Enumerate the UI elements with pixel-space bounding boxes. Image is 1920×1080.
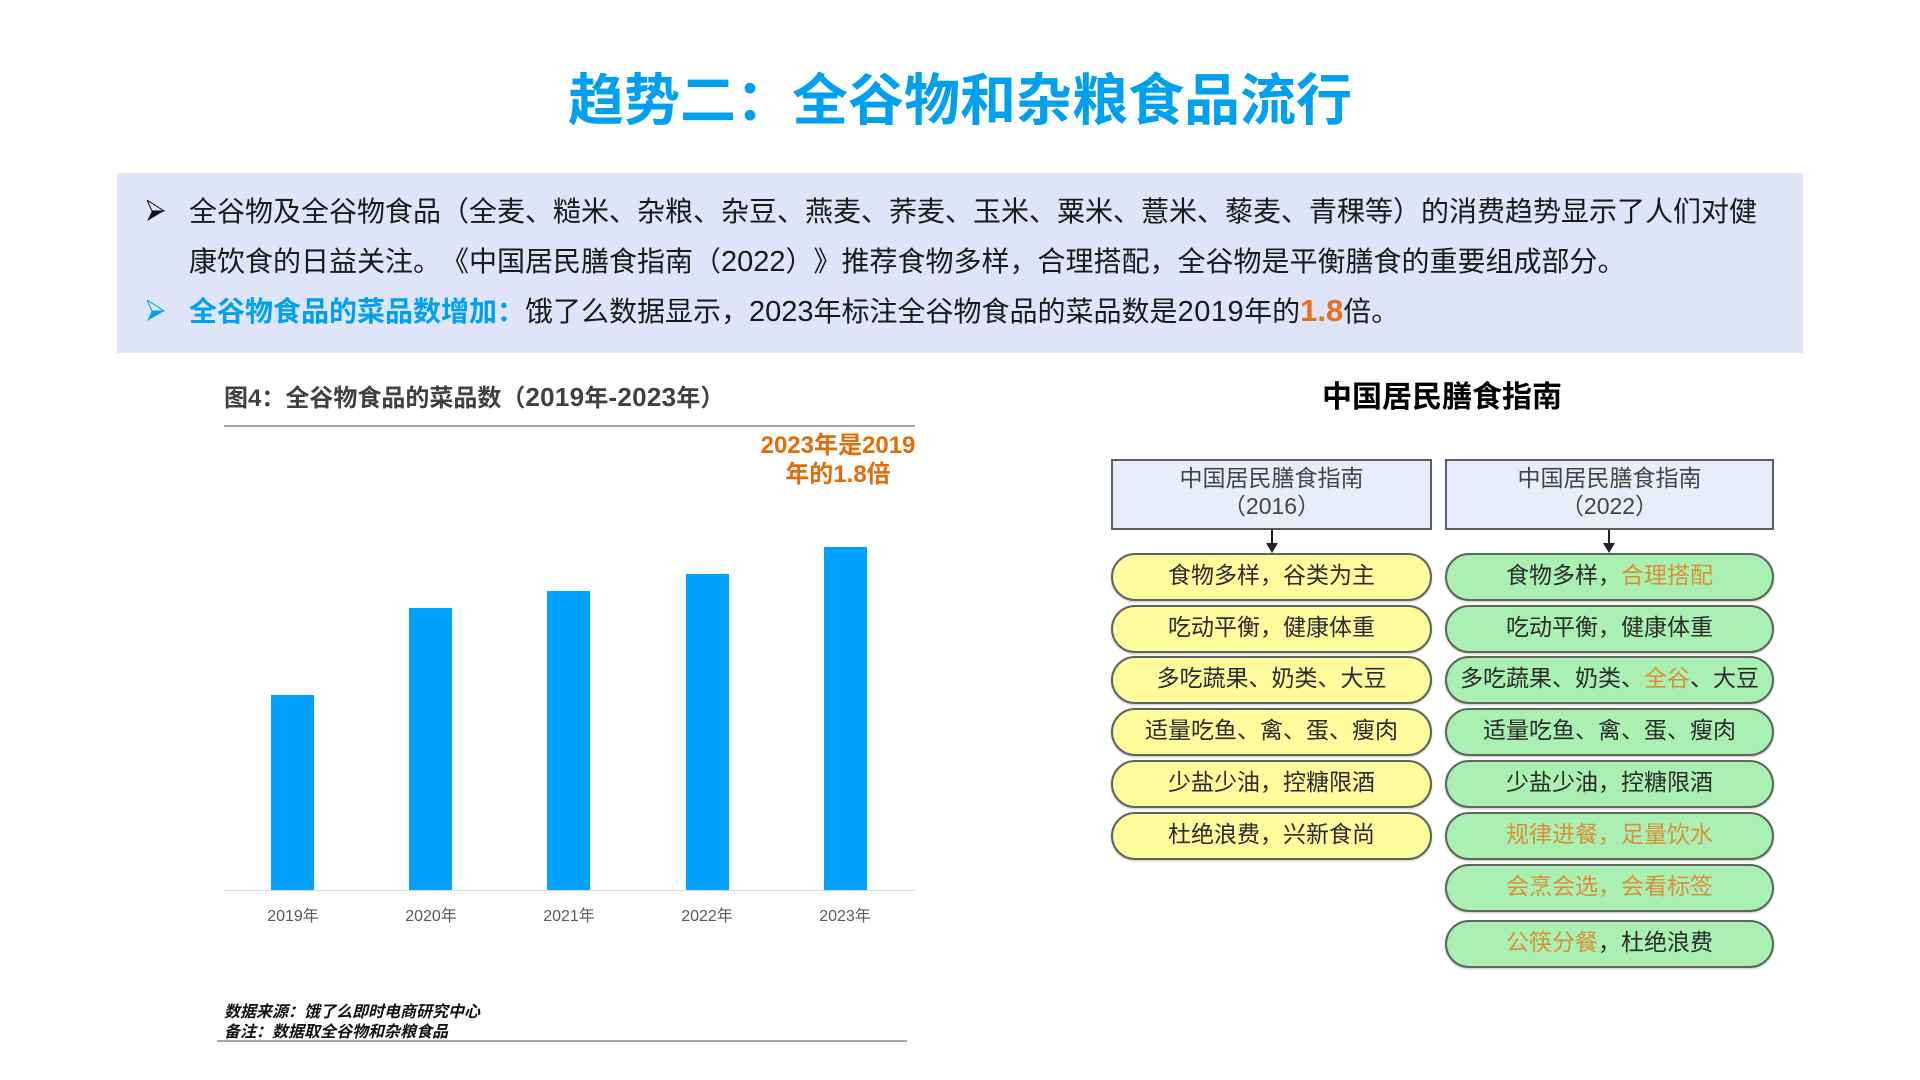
chart: bar chart of whole grain dishes	[224, 425, 915, 891]
header box 2016: 中国居民膳食指南	[1180, 465, 1364, 491]
pill 2022 row 2	[1445, 605, 1774, 653]
bar: 2023	[824, 547, 867, 890]
pill 2022 row 5: 少盐少油，控糖限酒	[1506, 769, 1713, 795]
pill 2022 row 6: 规律进餐，足量饮水	[1506, 821, 1713, 847]
icon: bullet arrow blue 2	[147, 300, 165, 321]
pill 2022 row 7	[1445, 864, 1774, 912]
pill 2016 row 4	[1111, 708, 1432, 756]
pill 2022 row 8	[1445, 920, 1774, 968]
pill 2016 row 2	[1111, 605, 1432, 653]
pill 2016 row 2: 吃动平衡，健康体重	[1168, 614, 1375, 640]
axis label: 2020: 2020年	[405, 908, 457, 925]
bar: 2022	[686, 574, 729, 890]
pill 2022 row 8: 公筷分餐，杜绝浪费	[1506, 929, 1713, 955]
pill 2016 row 5: 少盐少油，控糖限酒	[1168, 769, 1375, 795]
header box 2022: （2022）	[1561, 493, 1658, 519]
pill 2022 row 6	[1445, 812, 1774, 860]
pill 2022 row 2: 吃动平衡，健康体重	[1506, 614, 1713, 640]
axis label: 2019: 2019年	[267, 908, 319, 925]
bar: 2019	[271, 695, 314, 890]
pill 2022 row 1	[1445, 553, 1774, 601]
title: 趋势二：全谷物和杂粮食品流行	[568, 69, 1352, 132]
axis label: 2022: 2022年	[681, 908, 733, 925]
heading: dietary guidelines: 中国居民膳食指南	[1322, 381, 1562, 414]
pill 2016 row 3: 多吃蔬果、奶类、大豆	[1156, 665, 1386, 691]
pill 2016 row 6	[1111, 812, 1432, 860]
pill 2022 row 7: 会烹会选，会看标签	[1506, 873, 1713, 899]
pill 2016 row 3	[1111, 656, 1432, 704]
header box 2022	[1445, 459, 1774, 530]
bar: 2020	[409, 608, 452, 890]
bar: 2021	[547, 591, 590, 890]
text: bullet two: 全谷物食品的菜品数增加：饿了么数据显示，2023年标注全谷物食品的菜品数是2019年的1.8倍。	[189, 293, 1399, 328]
callout: 1.8x annotation	[761, 432, 915, 488]
icon: bullet arrow black 1	[147, 200, 165, 221]
source note: 数据来源：饿了么即时电商研究中心	[224, 1004, 480, 1021]
source note	[224, 1003, 480, 1041]
pill 2022 row 5	[1445, 760, 1774, 808]
axis label: 2023: 2023年	[819, 908, 871, 925]
text: bullet one line one: 全谷物及全谷物食品（全麦、糙米、杂粮、杂豆、燕麦、荞麦、玉米、粟米、薏米、藜麦、青稞等）的消费趋势显示了人们对健	[189, 196, 1757, 227]
header box 2016	[1111, 459, 1432, 530]
header box 2016: （2016）	[1223, 493, 1320, 519]
pill 2022 row 4	[1445, 708, 1774, 756]
arrow 2022	[1603, 530, 1615, 553]
text: bullet one line two: 康饮食的日益关注。《中国居民膳食指南（2022）》推荐食物多样，合理搭配，全谷物是平衡膳食的重要组成部分。	[189, 246, 1626, 278]
panel: summary text	[117, 173, 1803, 353]
axis label: 2021: 2021年	[543, 908, 595, 925]
header box 2022: 中国居民膳食指南	[1518, 465, 1702, 491]
pill 2022 row 4: 适量吃鱼、禽、蛋、瘦肉	[1483, 717, 1736, 743]
chart title: 图4：全谷物食品的菜品数（2019年-2023年）	[224, 382, 724, 412]
arrow 2016	[1266, 530, 1278, 553]
pill 2016 row 4: 适量吃鱼、禽、蛋、瘦肉	[1145, 717, 1398, 743]
pill 2016 row 1	[1111, 553, 1432, 601]
callout: 1.8x annotation: 2023年是2019	[761, 432, 915, 459]
pill 2016 row 1: 食物多样，谷类为主	[1168, 562, 1375, 588]
source note: 备注：数据取全谷物和杂粮食品	[224, 1024, 448, 1041]
pill 2022 row 3: 多吃蔬果、奶类、全谷、大豆	[1460, 665, 1759, 691]
source rule	[217, 1040, 907, 1042]
callout: 1.8x annotation: 年的1.8倍	[785, 461, 891, 488]
pill 2022 row 3	[1445, 656, 1774, 704]
panel: guideline comparison diagram	[1111, 459, 1774, 553]
pill 2016 row 6: 杜绝浪费，兴新食尚	[1168, 821, 1375, 847]
pill 2016 row 5	[1111, 760, 1432, 808]
pill 2022 row 1: 食物多样，合理搭配	[1506, 562, 1713, 588]
